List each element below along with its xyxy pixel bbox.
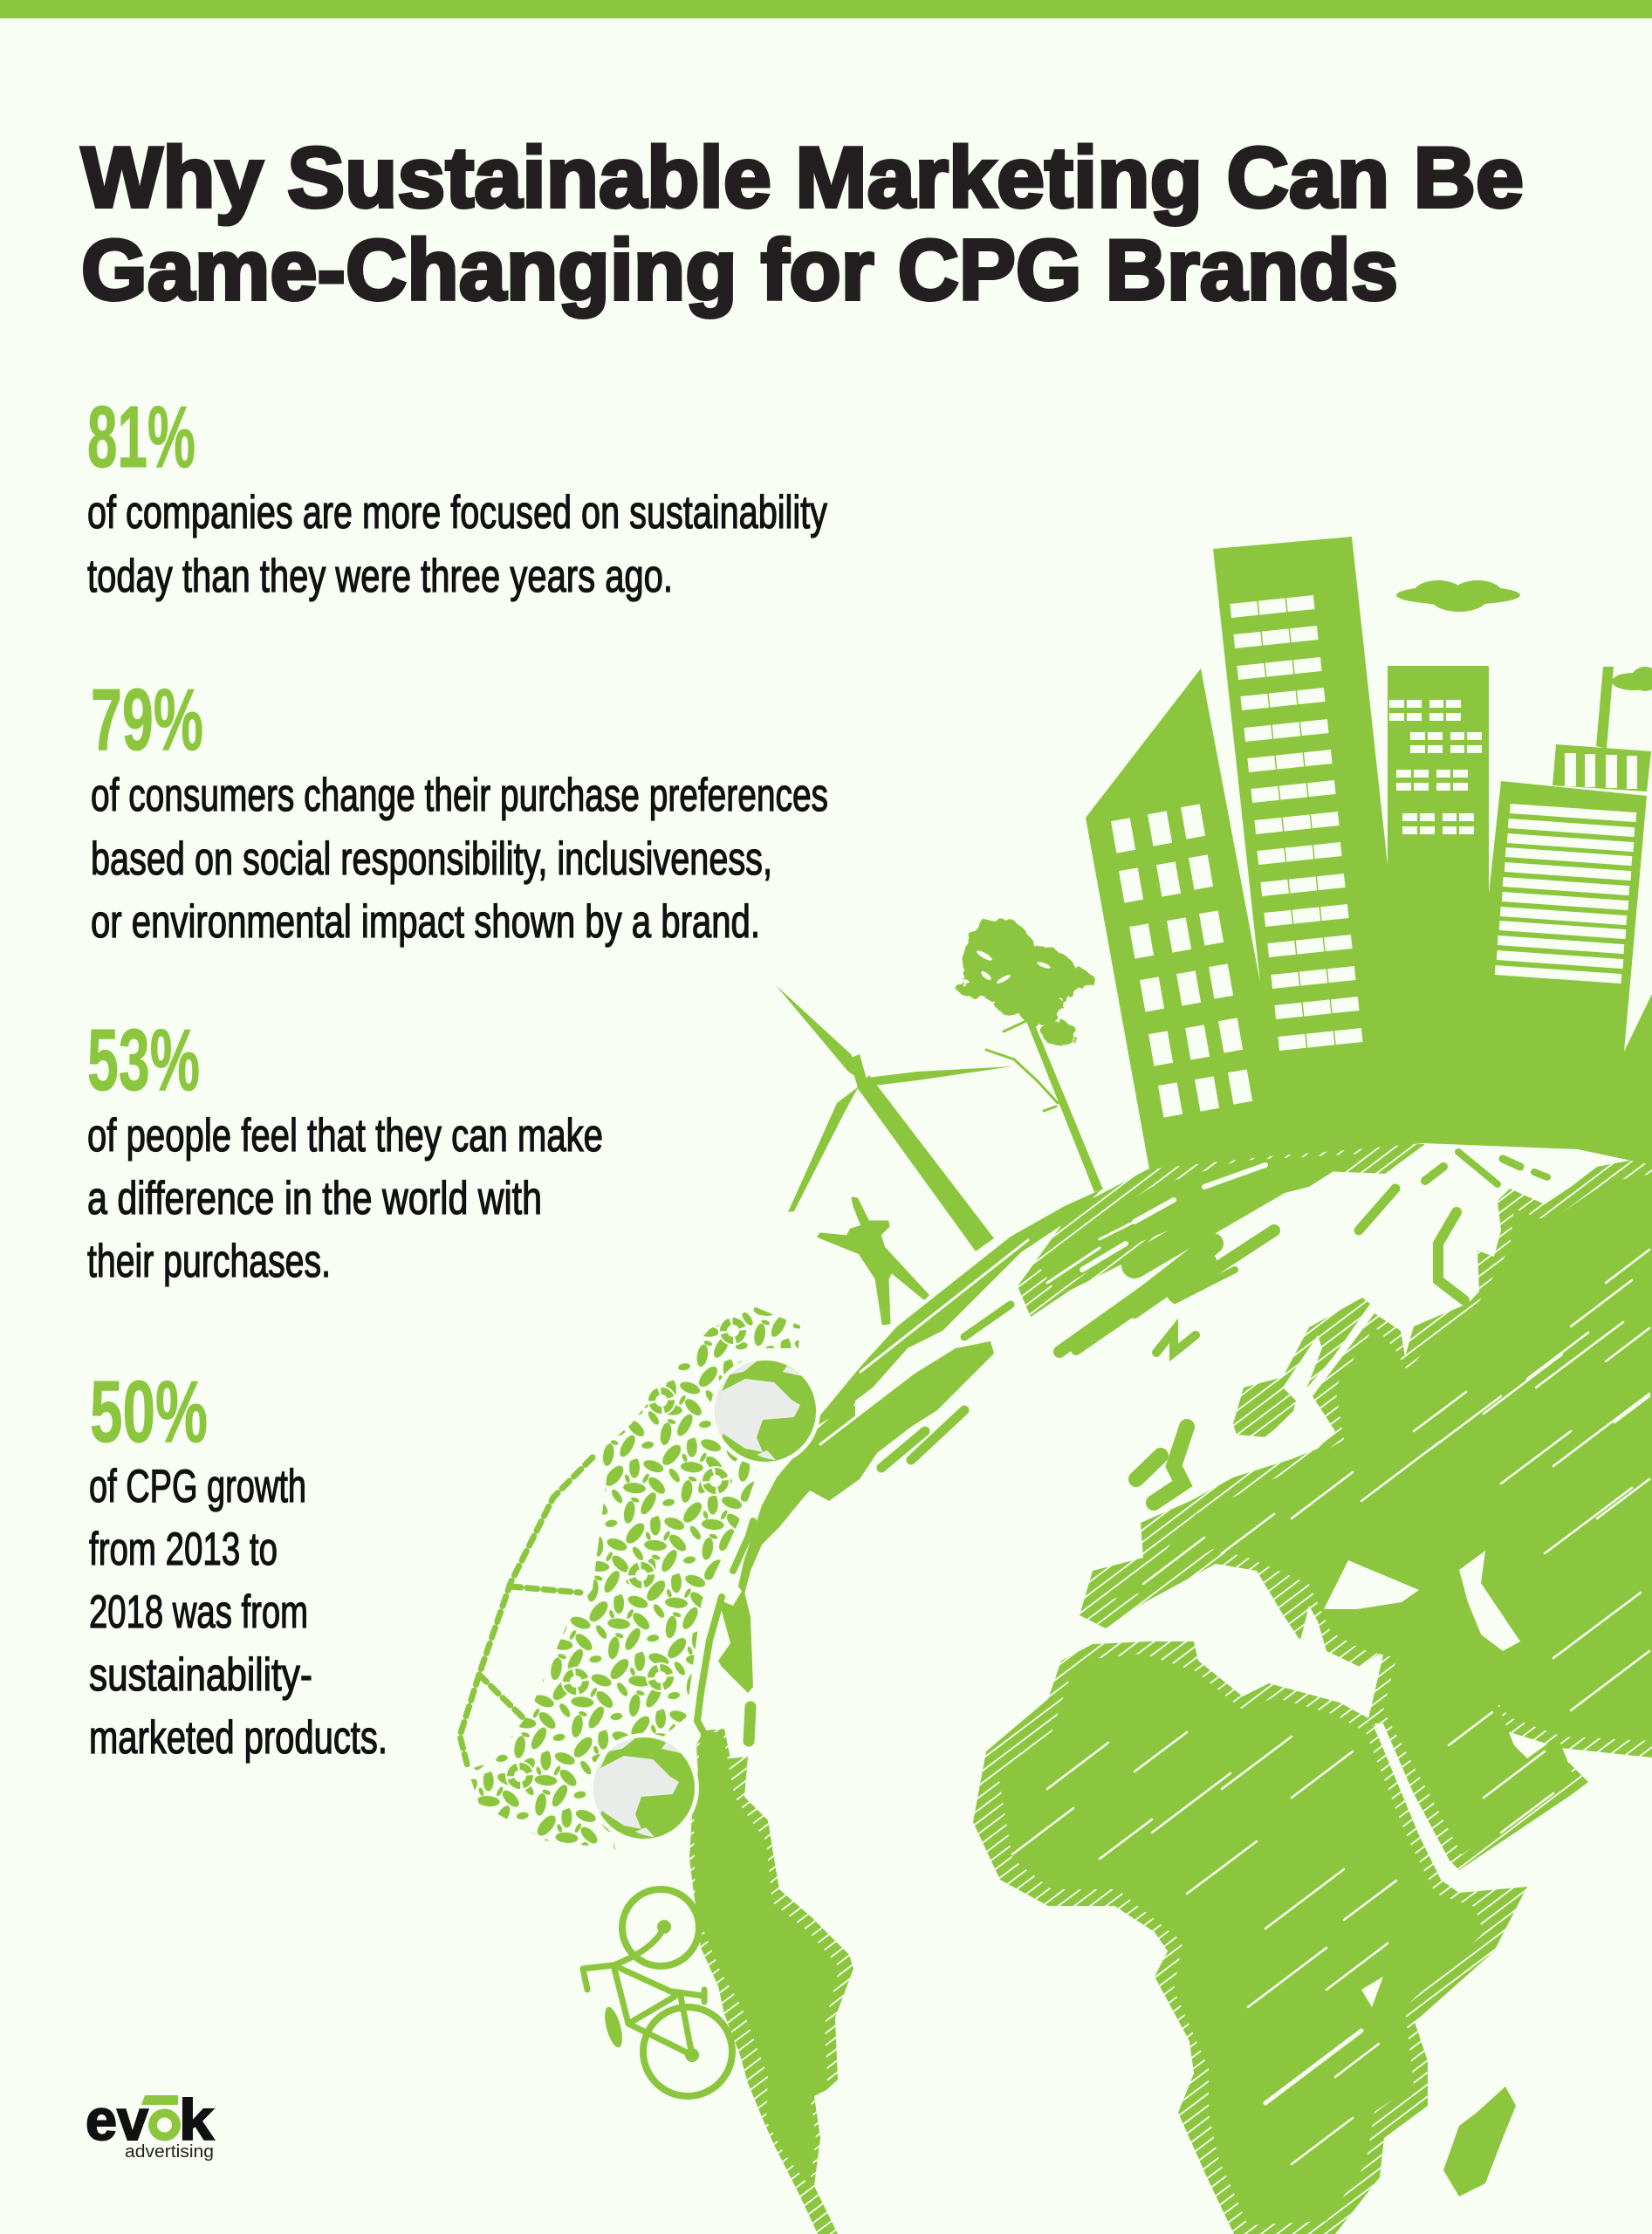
stat block: 79% bbox=[91, 671, 828, 948]
Eurasia white slashes bbox=[1143, 1250, 1649, 1833]
stat description 79%: of consumers change their purchase preferences bbox=[91, 770, 828, 821]
north America white slashes bbox=[820, 1165, 1265, 1444]
turbine tower bbox=[857, 1075, 994, 1251]
illustration: bicycle bbox=[583, 1889, 732, 2096]
bicycle pedal bbox=[601, 2005, 626, 2049]
illustration: scribbled globe bbox=[689, 1144, 1652, 2234]
rooftop block with chimney bbox=[1553, 667, 1651, 791]
bicycle hubs bbox=[657, 1920, 699, 2062]
stat number 53%: 53% bbox=[87, 1011, 200, 1109]
title bbox=[81, 129, 1524, 318]
logo: evok advertising bbox=[86, 2087, 214, 2162]
illustration: wind turbine bbox=[776, 985, 1012, 1251]
South America hatched outline bbox=[689, 1729, 853, 2234]
stat description 79% bbox=[91, 770, 828, 948]
turbine blade right bbox=[867, 1066, 1012, 1086]
stat description 81%: today than they were three years ago. bbox=[87, 551, 673, 602]
stat description 53% bbox=[87, 1110, 603, 1287]
Africa white slashes bbox=[1012, 1732, 1396, 2164]
turbine nacelle bbox=[849, 1054, 867, 1091]
stat block: 50% bbox=[89, 1363, 387, 1764]
logo green o bbox=[153, 2114, 176, 2136]
rear wheel globe bbox=[593, 1737, 695, 1839]
stat number 79%: 79% bbox=[91, 671, 203, 769]
Africa hatched outline bbox=[973, 1641, 1527, 2234]
tree trunk bbox=[1023, 1012, 1103, 1192]
top accent bar bbox=[0, 0, 1652, 18]
illustration: city skyline bbox=[1086, 537, 1652, 1169]
stat description 79%: based on social responsibility, inclusiveness, bbox=[91, 833, 772, 885]
South America bbox=[689, 1729, 853, 2234]
logo letter k: k bbox=[179, 2087, 214, 2152]
north America scribble bands bbox=[738, 1144, 1425, 1594]
stat block: 81% bbox=[87, 388, 827, 602]
stat description 50%: sustainability- bbox=[89, 1649, 312, 1701]
Eurasia bbox=[1080, 1156, 1652, 1870]
stat description 81% bbox=[87, 487, 827, 602]
Africa bbox=[973, 1641, 1527, 2234]
logo tagline: advertising bbox=[125, 2142, 214, 2162]
illustration: tree bbox=[956, 918, 1103, 1192]
scribble strokes bbox=[697, 1152, 1547, 1741]
Eurasia solid mass bbox=[1101, 1174, 1652, 1854]
stat description 50%: from 2013 to bbox=[89, 1524, 278, 1575]
stat description 50%: 2018 was from bbox=[89, 1586, 308, 1638]
Alaska fragment bbox=[718, 1588, 753, 1693]
South America solid core bbox=[694, 1732, 840, 2186]
recycled flower rosettes bbox=[505, 1316, 748, 1791]
Madagascar bbox=[1443, 2087, 1516, 2196]
tree branches bbox=[986, 1021, 1058, 1111]
stat description 81%: of companies are more focused on sustainability bbox=[87, 487, 827, 538]
chimney smoke bbox=[1612, 667, 1652, 691]
right building stripes bbox=[1495, 804, 1636, 983]
title: Game-Changing for CPG Brands bbox=[81, 222, 1398, 318]
turbine blade lower-left bbox=[788, 1086, 859, 1212]
Africa solid mass bbox=[999, 1654, 1484, 2225]
tall building windows bbox=[1230, 595, 1363, 1051]
bicycle rear wheel bbox=[643, 2007, 732, 2096]
Eurasia hatched outline bbox=[1080, 1156, 1652, 1870]
tree canopy bbox=[956, 918, 1094, 1045]
middle building windows bbox=[1389, 700, 1482, 834]
rooftop slits bbox=[1565, 753, 1637, 789]
stat description 53%: of people feel that they can make bbox=[87, 1110, 603, 1162]
turbine blade upper-left bbox=[776, 985, 864, 1082]
stat description 50% bbox=[89, 1461, 387, 1764]
stat description 79%: or environmental impact shown by a brand. bbox=[91, 896, 760, 948]
bicycle frame bbox=[583, 1927, 704, 2055]
bicycle front wheel bbox=[622, 1889, 699, 1966]
illustration: leaf car bbox=[460, 1307, 820, 1849]
stat description 53%: their purchases. bbox=[87, 1236, 331, 1287]
stat number 50%: 50% bbox=[90, 1363, 208, 1461]
stat number 81%: 81% bbox=[87, 388, 195, 486]
buildings silhouette bbox=[1086, 537, 1652, 1169]
illustration: jumping person bbox=[819, 1198, 928, 1324]
inland seas bbox=[1283, 1335, 1520, 1854]
stat description 50%: marketed products. bbox=[89, 1712, 387, 1764]
stat block: 53% bbox=[87, 1011, 603, 1287]
front wheel globe bbox=[715, 1360, 816, 1462]
logo letters ev: ev bbox=[86, 2087, 148, 2152]
cloud bbox=[1396, 580, 1520, 612]
stat description 53%: a difference in the world with bbox=[87, 1173, 542, 1224]
Scandinavia bbox=[1233, 1298, 1370, 1437]
tree canopy gaps bbox=[976, 949, 1051, 985]
car window outline bbox=[460, 1457, 593, 1767]
stat description 50%: of CPG growth bbox=[89, 1461, 306, 1512]
title: Why Sustainable Marketing Can Be bbox=[81, 129, 1524, 225]
Lake Victoria gap bbox=[1361, 1977, 1383, 2007]
left building windows bbox=[1111, 804, 1252, 1118]
wheel clearance bbox=[589, 1356, 820, 1843]
car body of leaves bbox=[468, 1307, 800, 1849]
logo green macron bbox=[141, 2095, 178, 2105]
